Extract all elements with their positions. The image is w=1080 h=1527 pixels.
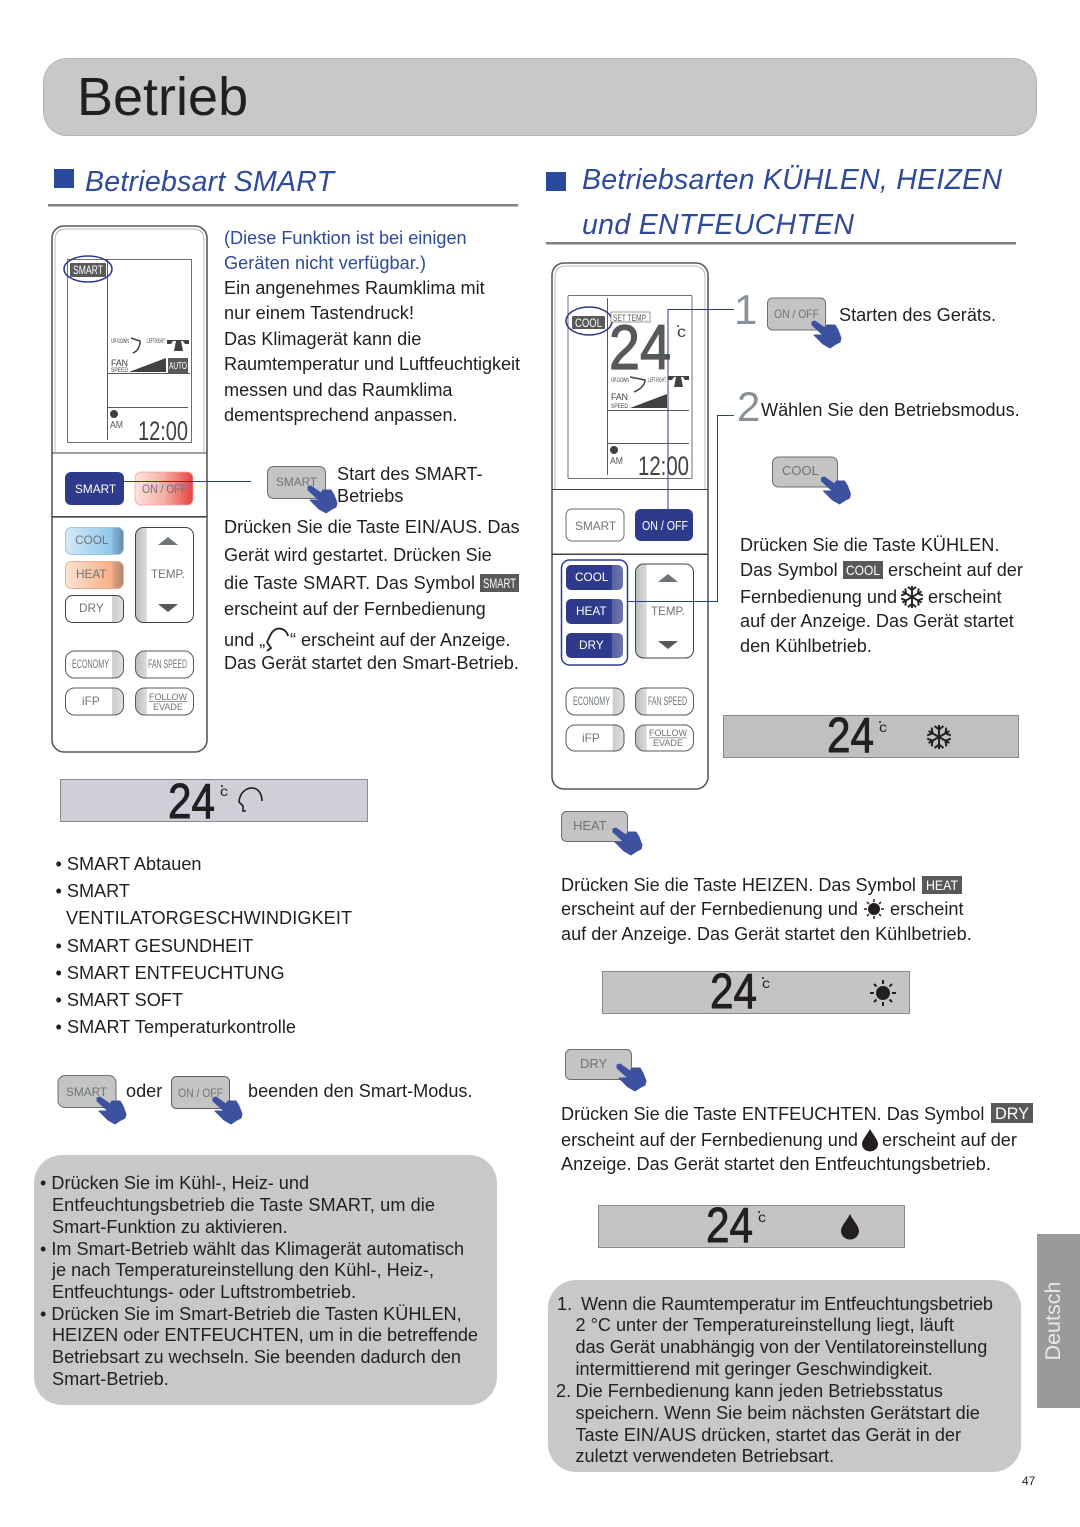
pressed button: DRY [566, 1050, 646, 1091]
list of smart functions: • SMART GESUNDHEIT [56, 936, 253, 956]
button: FAN SPEED [636, 688, 694, 715]
cool text: den Kühlbetrieb. [740, 636, 872, 656]
LCD chip: COOL: COOL [575, 316, 602, 330]
button: FOLLOW EVADE: EVADE [653, 738, 683, 749]
button: TEMP rocker: TEMP. [651, 604, 685, 618]
language tab: Deutsch [1037, 1234, 1080, 1408]
button: HEAT: HEAT [76, 567, 107, 581]
display: smart: c [220, 783, 228, 799]
LCD swing and fan indicators: FAN [611, 392, 628, 402]
pressed button: ON/OFF end [172, 1076, 242, 1124]
heat text: erscheint [890, 899, 963, 919]
LCD swing and fan indicators: AUTO [169, 360, 187, 372]
cool text [740, 535, 1023, 656]
note panel: modes: 2 °C unter der Temperatureinstellung liegt, läuft [576, 1315, 954, 1335]
intro text: Raumtemperatur und Luftfeuchtigkeit [224, 354, 520, 374]
note panel: smart: HEIZEN oder ENTFEUCHTEN, um in die betreffende [52, 1325, 478, 1345]
list of smart functions: • SMART [56, 881, 130, 901]
button: HEAT [66, 562, 124, 588]
dry text: Drücken Sie die Taste ENTFEUCHTEN. Das Symbol [561, 1104, 984, 1124]
LCD swing and fan indicators: SPEED [111, 367, 128, 374]
text: Start des SMART-Betriebs: Start des SMART- [337, 464, 483, 484]
list of smart functions: VENTILATORGESCHWINDIGKEIT [66, 908, 352, 928]
button: ECONOMY: ECONOMY [573, 694, 610, 708]
LCD swing and fan indicators: LEFT-RIGHT [147, 339, 165, 345]
list of smart functions [56, 854, 352, 1037]
heading: Betriebsart SMART: Betriebsart SMART [85, 166, 337, 198]
pressed button: SMART end [58, 1076, 126, 1124]
cool text: erscheint [928, 587, 1001, 607]
button: TEMP rocker [636, 564, 694, 658]
LCD clock [110, 410, 188, 446]
smart steps text [224, 517, 520, 673]
list of smart functions: • SMART Temperaturkontrolle [56, 1017, 296, 1037]
smart steps text: die Taste SMART. Das Symbol [224, 573, 475, 593]
button: FOLLOW EVADE [636, 725, 694, 751]
smart steps text: erscheint auf der Fernbedienung [224, 599, 486, 619]
list of smart functions: • SMART Abtauen [56, 854, 202, 874]
mode button group [562, 560, 628, 665]
step number 1: 1 [734, 286, 757, 333]
display: dry: c [758, 1209, 766, 1225]
button: SMART: SMART [75, 482, 116, 496]
pressed button: DRY: DRY [580, 1056, 608, 1071]
pressed button: SMART [268, 466, 337, 513]
display: cool [724, 709, 1018, 763]
display: dry [598, 1199, 904, 1253]
remote control: smart mode [52, 226, 207, 752]
note panel: modes: Taste EIN/AUS drücken, startet das Gerät in der [576, 1425, 961, 1445]
pressed button: COOL [772, 457, 850, 504]
text: Start des SMART-Betriebs [337, 464, 483, 506]
pressed button: SMART end: SMART [66, 1085, 107, 1099]
heat text: auf der Anzeige. Das Gerät startet den Kühlbetrieb. [561, 924, 972, 944]
LCD swing and fan indicators: FAN [111, 358, 128, 368]
intro text: Geräten nicht verfügbar.) [224, 253, 426, 273]
button: FOLLOW EVADE [136, 688, 194, 715]
note panel: modes [548, 1280, 1021, 1472]
connector line: step 2 [628, 416, 734, 602]
text: oder beenden [126, 1081, 472, 1101]
intro text: messen und das Raumklima [224, 380, 453, 400]
display: heat [602, 965, 910, 1019]
LCD swing and fan indicators [111, 338, 189, 374]
LCD chip: SMART [64, 256, 112, 282]
note panel: smart: • Drücken Sie im Smart-Betrieb die Tasten KÜHLEN, [40, 1304, 462, 1324]
cool text: erscheint auf der [888, 560, 1023, 580]
heat text: Drücken Sie die Taste HEIZEN. Das Symbol [561, 875, 916, 895]
text: Wählen: Wählen Sie den Betriebsmodus. [761, 400, 1020, 420]
button: FAN SPEED: FAN SPEED [148, 657, 187, 671]
mode button group: DRY [579, 638, 604, 652]
display: dry: 24 [706, 1199, 753, 1253]
note panel: smart: je nach Temperatureinstellung den Kühl-, Heiz-, [51, 1260, 434, 1280]
list of smart functions: • SMART SOFT [56, 990, 183, 1010]
cool text: auf der Anzeige. Das Gerät startet [740, 611, 1014, 631]
note panel: smart: • Drücken Sie im Kühl-, Heiz- und [40, 1173, 309, 1193]
button: SMART [65, 472, 124, 505]
note panel: smart [34, 1155, 497, 1405]
LCD swing and fan indicators: UP-DOWN [111, 339, 129, 345]
cool text: Fernbedienung und [740, 587, 897, 607]
text: Start des SMART-Betriebs: Betriebs [337, 486, 403, 506]
heading: Betriebsarten: und ENTFEUCHTEN [582, 209, 854, 241]
intro text: Ein angenehmes Raumklima mit [224, 278, 485, 298]
connector line: smart [124, 480, 251, 482]
intro text: dementsprechend anpassen. [224, 405, 458, 425]
pressed button: ON/OFF: ON / OFF [774, 307, 819, 321]
icon: drop inline [862, 1129, 878, 1152]
remote control: modes [552, 263, 708, 789]
button: FOLLOW EVADE: FOLLOW [649, 728, 687, 739]
note panel: smart: Entfeuchtungs- oder Luftstrombetrieb. [52, 1282, 356, 1302]
list of smart functions: • SMART ENTFEUCHTUNG [56, 963, 285, 983]
button: FAN SPEED [136, 651, 194, 678]
smart steps text: Das Gerät startet den Smart-Betrieb. [224, 653, 519, 673]
button: ON/OFF active [635, 509, 693, 541]
note panel: smart: • Im Smart-Betrieb wählt das Klimagerät automatisch [40, 1239, 464, 1259]
LCD swing and fan indicators: SPEED [611, 403, 628, 410]
LCD set temperature: 24 [609, 313, 671, 383]
LCD swing and fan indicators: UP-DOWN [611, 378, 629, 384]
button: SMART [566, 509, 624, 541]
button: ON/OFF active: ON / OFF [642, 519, 688, 533]
display: smart [60, 775, 368, 829]
button: FOLLOW EVADE: EVADE [153, 702, 183, 713]
icon: smart head inline [267, 629, 288, 651]
note panel: smart: Smart-Funktion zu aktivieren. [52, 1217, 288, 1237]
button: FAN SPEED: FAN SPEED [648, 694, 687, 708]
intro text: (Diese Funktion ist bei einigen [224, 228, 467, 248]
dry text: erscheint auf der [882, 1130, 1017, 1150]
button: ECONOMY [566, 688, 624, 715]
step number 2: 2 [737, 383, 760, 430]
mode button group: COOL [575, 570, 609, 584]
pressed button: HEAT [562, 812, 642, 855]
chip: COOL: COOL [846, 562, 880, 578]
text: oder beenden: oder [126, 1081, 162, 1101]
display: heat: c [762, 975, 770, 991]
smart steps text: und „ [224, 630, 265, 650]
button: COOL: COOL [75, 533, 109, 547]
LCD clock: 12:00 [138, 416, 188, 446]
note panel: modes: Die Fernbedienung kann jeden Betriebsstatus [576, 1381, 943, 1401]
note panel: smart: Smart-Betrieb. [52, 1369, 169, 1389]
note panel: modes: zuletzt verwendeten Betriebsart. [576, 1446, 834, 1466]
button: ECONOMY [66, 651, 124, 678]
chip: HEAT: HEAT [926, 877, 958, 893]
display: cool: c [879, 719, 887, 735]
button: ECONOMY: ECONOMY [72, 657, 109, 671]
note panel: smart: Entfeuchtungsbetrieb die Taste SMART, um die [52, 1195, 435, 1215]
button: DRY: DRY [79, 601, 104, 615]
heading: Betriebsarten [546, 164, 1016, 244]
cool text: Drücken Sie die Taste KÜHLEN. [740, 535, 999, 555]
LCD set temperature: c [677, 324, 686, 341]
button: TEMP rocker [136, 528, 194, 622]
button: ON/OFF: ON / OFF [142, 482, 187, 496]
pressed button: HEAT: HEAT [573, 818, 607, 833]
pressed button: ON/OFF [768, 298, 841, 348]
mode button group: HEAT [576, 604, 607, 618]
icon: snowflake inline [900, 586, 924, 608]
pressed button: COOL: COOL [782, 463, 819, 478]
pressed button: ON/OFF end: ON / OFF [178, 1086, 223, 1100]
intro text: Das Klimagerät kann die [224, 329, 421, 349]
smart steps text: “ erscheint auf der Anzeige. [290, 630, 510, 650]
smart steps text: Gerät wird gestartet. Drücken Sie [224, 545, 492, 565]
dry text: erscheint auf der Fernbedienung und [561, 1130, 858, 1150]
button: iFP: iFP [582, 731, 600, 745]
note panel: modes: 1. [557, 1294, 572, 1314]
dry text: Anzeige. Das Gerät startet den Entfeuchtungsbetrieb. [561, 1154, 991, 1174]
intro text [224, 228, 520, 425]
LCD chip: COOL [566, 307, 612, 335]
text: Starten: Starten des Geräts. [839, 305, 996, 325]
note panel: modes: das Gerät unabhängig von der Ventilatoreinstellung [576, 1337, 987, 1357]
button: DRY [66, 596, 124, 622]
cool text: Das Symbol [740, 560, 838, 580]
button: ON/OFF [135, 472, 193, 505]
button: iFP [566, 725, 624, 751]
button: TEMP rocker: TEMP. [151, 567, 185, 581]
display: smart: 24 [168, 775, 215, 829]
LCD chip: SMART: SMART [73, 263, 103, 277]
LCD clock: AM [110, 420, 123, 431]
icon: sun inline [864, 899, 884, 919]
heat text: erscheint auf der Fernbedienung und [561, 899, 858, 919]
intro text: nur einem Tastendruck! [224, 303, 414, 323]
button: iFP [66, 688, 124, 715]
heading: Betriebsarten: Betriebsarten KÜHLEN, HEIZEN [582, 164, 1002, 196]
title banner: Betrieb [77, 67, 248, 127]
page number: 47 [1022, 1474, 1036, 1488]
pressed button: SMART: SMART [276, 475, 317, 489]
title banner [44, 58, 1036, 136]
LCD set temperature: SET TEMP. [613, 313, 647, 323]
note panel: modes: intermittierend mit geringer Geschwindigkeit. [576, 1359, 933, 1379]
button: iFP: iFP [82, 694, 100, 708]
chip: SMART [480, 574, 519, 592]
LCD clock [610, 446, 689, 481]
LCD clock: 12:00 [638, 451, 689, 481]
display: cool: 24 [827, 709, 874, 763]
LCD clock: AM [610, 456, 623, 467]
note panel: modes: Wenn die Raumtemperatur im Entfeuchtungsbetrieb [581, 1294, 993, 1314]
heat text [561, 875, 972, 944]
note panel: modes: 2. [556, 1381, 571, 1401]
button: FOLLOW EVADE: FOLLOW [149, 692, 187, 703]
button: SMART: SMART [575, 519, 616, 533]
note panel: modes: speichern. Wenn Sie beim nächsten Gerätstart die [576, 1403, 980, 1423]
dry text [561, 1104, 1017, 1174]
text: oder beenden: beenden den Smart-Modus. [248, 1081, 472, 1101]
display: heat: 24 [710, 965, 757, 1019]
LCD swing and fan indicators: LEFT-RIGHT [648, 378, 666, 384]
heading: Betriebsart SMART [48, 166, 518, 206]
chip: SMART: SMART [483, 575, 516, 591]
note panel: smart: Betriebsart zu wechseln. Sie beenden dadurch den [52, 1347, 461, 1367]
button: COOL [66, 528, 124, 554]
language tab: Deutsch: Deutsch [1041, 1282, 1065, 1360]
LCD swing and fan indicators [611, 376, 689, 410]
chip: DRY: DRY [995, 1105, 1029, 1123]
connector line: step 1 [668, 310, 734, 509]
smart steps text: Drücken Sie die Taste EIN/AUS. Das [224, 517, 520, 537]
